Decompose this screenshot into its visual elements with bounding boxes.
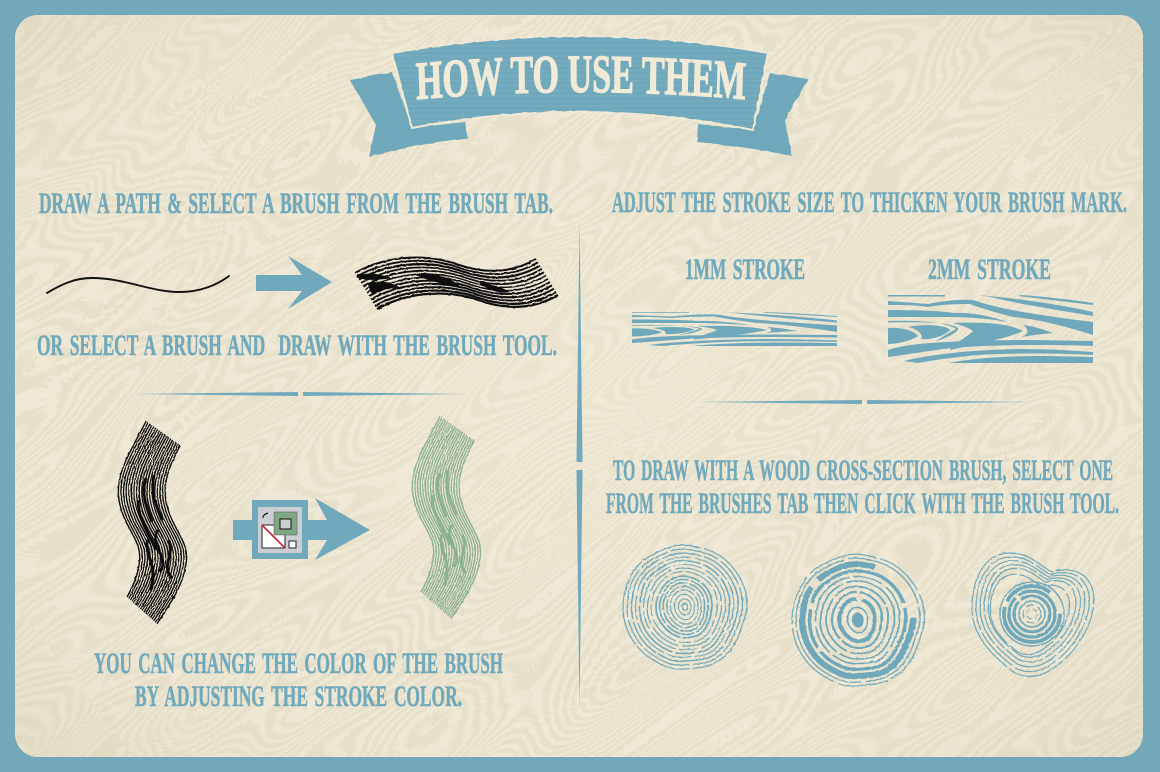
stroke colour tool icon (252, 500, 308, 559)
caption: change colour: YOU CAN CHANGE THE COLOR OF THE BRUSH (94, 647, 503, 680)
vertical divider (576, 222, 582, 710)
heading: or select a brush: OR SELECT A BRUSH AND DRAW WITH THE BRUSH TOOL. (37, 329, 557, 362)
tree ring 1 (623, 545, 747, 669)
2mm stroke sample (888, 295, 1093, 363)
black vertical wood brush (106, 405, 201, 630)
caption: change colour (94, 647, 503, 713)
banner texture lines (394, 38, 766, 128)
tree ring 2 (792, 554, 924, 686)
banner right tail (697, 73, 808, 156)
left horizontal divider (135, 392, 467, 396)
color arrow (233, 498, 370, 560)
banner main ribbon (392, 36, 768, 130)
right horizontal divider (698, 400, 1032, 404)
arrow: path to brush (256, 256, 332, 309)
banner: how to use them (350, 35, 808, 157)
green vertical wood brush (400, 400, 495, 625)
path line sample (47, 276, 229, 293)
banner title: HOW TO USE THEM (416, 56, 746, 100)
label: 2mm stroke: 2MM STROKE (928, 253, 1051, 286)
banner left tail (350, 72, 468, 157)
arrow shape (233, 498, 370, 560)
caption: cross-section brush (606, 454, 1119, 520)
label: 1mm stroke: 1MM STROKE (685, 253, 805, 286)
caption: change colour: BY ADJUSTING THE STROKE COLOR. (135, 680, 462, 713)
1mm stroke sample (632, 312, 837, 346)
banner title (416, 56, 746, 100)
tree ring 3 (972, 553, 1094, 676)
heading: draw a path: DRAW A PATH & SELECT A BRUSH FROM THE BRUSH TAB. (39, 187, 553, 220)
black horizontal wood brush (355, 258, 558, 309)
